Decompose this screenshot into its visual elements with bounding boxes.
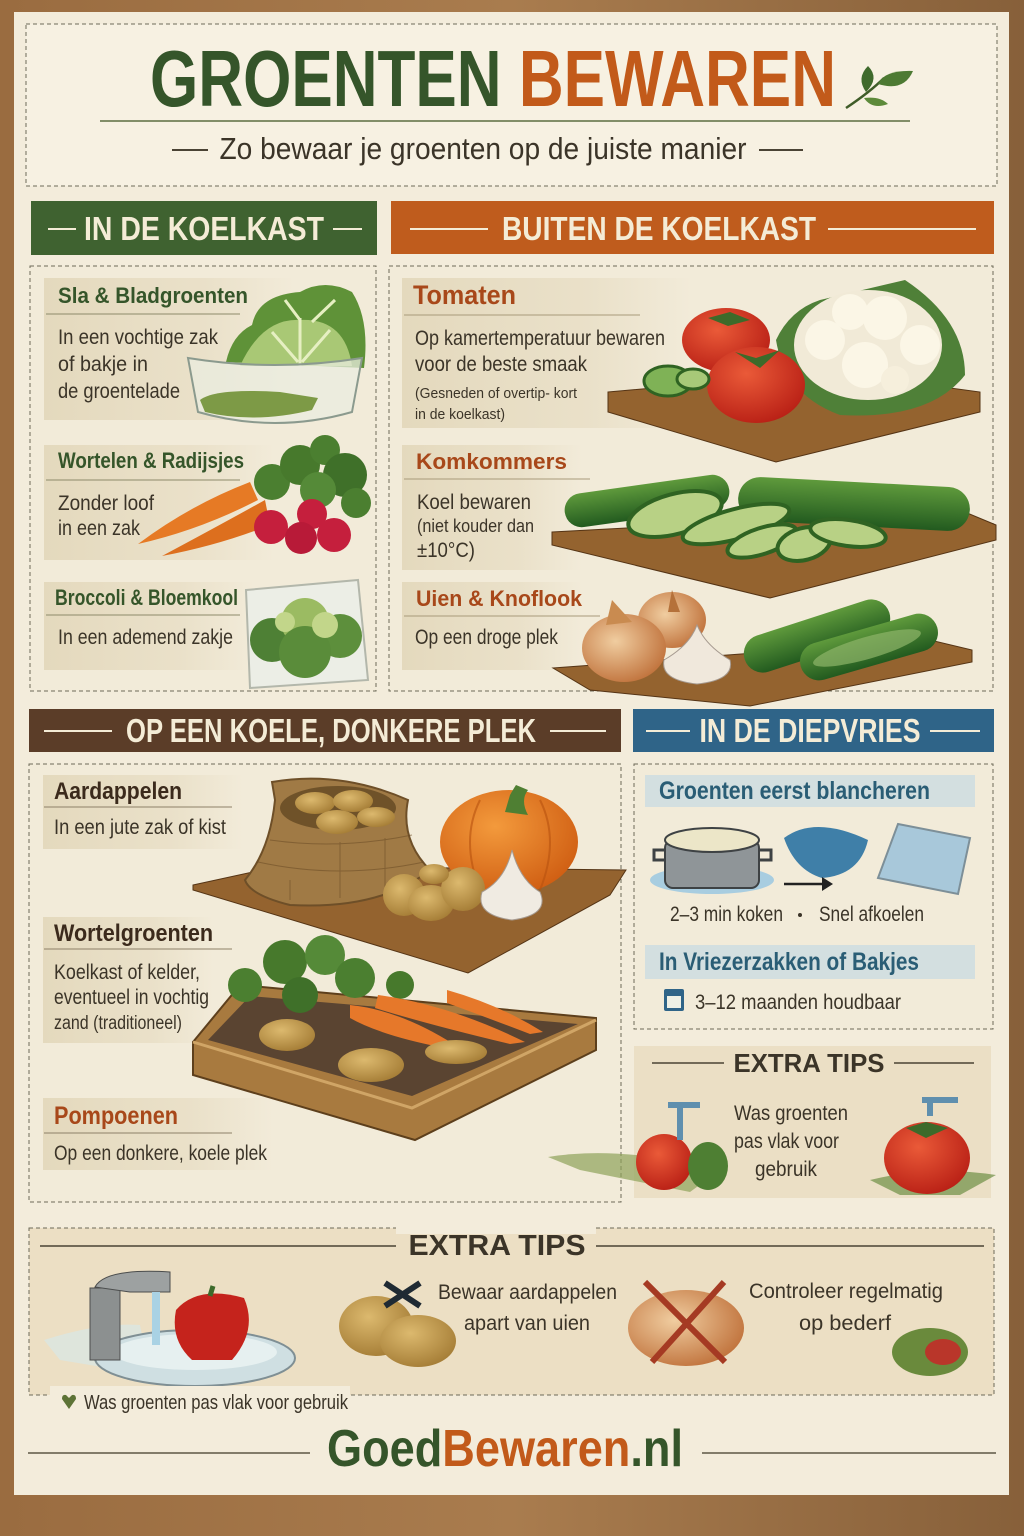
item: broccoli: In een ademend zakje: [58, 626, 233, 649]
icon: spoiled vegetable: [892, 1328, 968, 1376]
text: aardappelen apart: apart van uien: [464, 1312, 590, 1335]
item: pompoenen: [43, 1098, 273, 1170]
item: tomaten: [402, 278, 980, 462]
heading: koele donkere plek: [29, 709, 621, 752]
heading: extra tips bottom: EXTRA TIPS: [408, 1230, 586, 1262]
item: wortelen: Zonder loof: [58, 492, 154, 515]
text: was groenten: Was groenten: [734, 1102, 848, 1125]
panel: buiten de koelkast: [389, 201, 996, 706]
item: wortelgroenten: Koelkast of kelder,: [54, 961, 200, 984]
item: wortelgroenten: eventueel in vochtig: [54, 986, 209, 1009]
icon: blanching steps: [650, 824, 970, 894]
item: wortelgroenten: [43, 917, 232, 1043]
icon: leaf sprig: [846, 66, 913, 108]
panel: op een koele donkere plek: [29, 709, 626, 1202]
title: GROENTEN BEWAREN: [150, 34, 836, 123]
item: tomaten: in de koelkast): [415, 406, 505, 423]
heading: buiten de koelkast: [391, 201, 994, 254]
panel: in de diepvries: [633, 709, 994, 1029]
icon: tomato and pepper under tap: [548, 1105, 728, 1192]
caption: koken: 2–3 min koken: [670, 903, 783, 926]
text: controleer: Controleer regelmatig: [749, 1280, 943, 1303]
item: komkommers: ±10°C): [417, 539, 475, 562]
heading: in de diepvries: IN DE DIEPVRIES: [700, 712, 920, 749]
item: uien: Op een droge plek: [415, 626, 558, 649]
heading: blancheren: Groenten eerst blancheren: [659, 777, 930, 805]
header panel: [26, 24, 997, 186]
heading: in de koelkast: [31, 201, 377, 255]
item: aardappelen: Aardappelen: [54, 778, 182, 805]
icon: potato sack, pumpkin on board: [193, 779, 626, 973]
text: aardappelen apart: Bewaar aardappelen: [438, 1281, 617, 1304]
panel: in de koelkast: [30, 201, 377, 691]
text: was groenten: gebruik: [755, 1158, 817, 1181]
icon: onions, garlic, cucumbers on board: [553, 590, 972, 706]
item: uien: [402, 582, 972, 706]
text: controleer: [749, 1280, 943, 1335]
heading: buiten de koelkast: BUITEN DE KOELKAST: [502, 210, 816, 247]
icon: tomato with tap: [870, 1100, 996, 1195]
item: aardappelen: [43, 775, 243, 849]
caption: koken: [670, 903, 924, 926]
heading: extra tips bottom: [40, 1226, 984, 1262]
item: komkommers: Koel bewaren: [417, 491, 531, 514]
item: uien: Uien & Knoflook: [416, 586, 583, 611]
heading: extra tips: EXTRA TIPS: [734, 1048, 884, 1078]
icon: carrots and radishes: [138, 435, 371, 556]
item: wortelgroenten: Wortelgroenten: [54, 920, 213, 947]
icon: tap washing pepper: [44, 1271, 295, 1386]
item: wortelen: [44, 435, 371, 560]
item: komkommers: Komkommers: [416, 449, 567, 474]
icon: potatoes with cross: [339, 1283, 456, 1367]
item: aardappelen: In een jute zak of kist: [54, 816, 226, 839]
panel: extra tips (bottom): [29, 1226, 994, 1416]
item: komkommers: [402, 445, 996, 598]
icon: tomatoes and cauliflower on board: [608, 280, 980, 462]
item: komkommers: (niet kouder dan: [417, 516, 534, 536]
item: sla: In een vochtige zak: [58, 326, 218, 349]
houdbaarheid: 3–12 maanden houdbaar: [695, 991, 901, 1014]
tip: was groenten: Was groenten pas vlak voor gebruik: [84, 1392, 349, 1414]
item: wortelen: Wortelen & Radijsjes: [58, 448, 244, 473]
item: broccoli: [44, 580, 368, 688]
item: sla: Sla & Bladgroenten: [58, 283, 248, 308]
icon: broccoli in bag: [246, 580, 368, 688]
caption: koken: Snel afkoelen: [819, 903, 924, 926]
text: controleer: op bederf: [799, 1312, 891, 1335]
panel: extra tips (small): [548, 1046, 996, 1198]
heading: koele donkere plek: OP EEN KOELE, DONKERE PLEK: [126, 712, 536, 749]
item: sla: of bakje in: [58, 353, 148, 376]
item: tomaten: Tomaten: [413, 280, 516, 310]
icon: cucumbers on board: [552, 473, 996, 598]
tip: was groenten: [50, 1386, 350, 1416]
footer: GoedBewaren.nl: [327, 1420, 683, 1478]
text: was groenten: pas vlak voor: [734, 1130, 839, 1153]
heading: in de koelkast: IN DE KOELKAST: [84, 210, 324, 247]
item: tomaten: voor de beste smaak: [415, 353, 587, 376]
text: aardappelen apart: [438, 1281, 617, 1335]
item: tomaten: Op kamertemperatuur bewaren: [415, 327, 665, 350]
item: tomaten: (Gesneden of overtip- kort: [415, 385, 578, 402]
heading: in de diepvries: [633, 709, 994, 752]
item: pompoenen: Pompoenen: [54, 1102, 178, 1130]
item: sla: de groentelade: [58, 380, 180, 403]
item: broccoli: Broccoli & Bloemkool: [55, 585, 238, 610]
heading: vriezerzakken: In Vriezerzakken of Bakjes: [659, 948, 919, 976]
icon: lettuce in bowl: [188, 285, 366, 423]
subtitle: Zo bewaar je groenten op de juiste manier: [220, 131, 746, 166]
item: sla: [44, 278, 366, 423]
item: wortelgroenten: zand (traditioneel): [54, 1013, 182, 1034]
item: pompoenen: Op een donkere, koele plek: [54, 1142, 267, 1165]
text: was groenten: [734, 1102, 848, 1181]
icon: carrots in sand crate: [193, 935, 596, 1140]
icon: onion crossed out: [628, 1282, 744, 1366]
item: wortelen: in een zak: [58, 517, 140, 540]
